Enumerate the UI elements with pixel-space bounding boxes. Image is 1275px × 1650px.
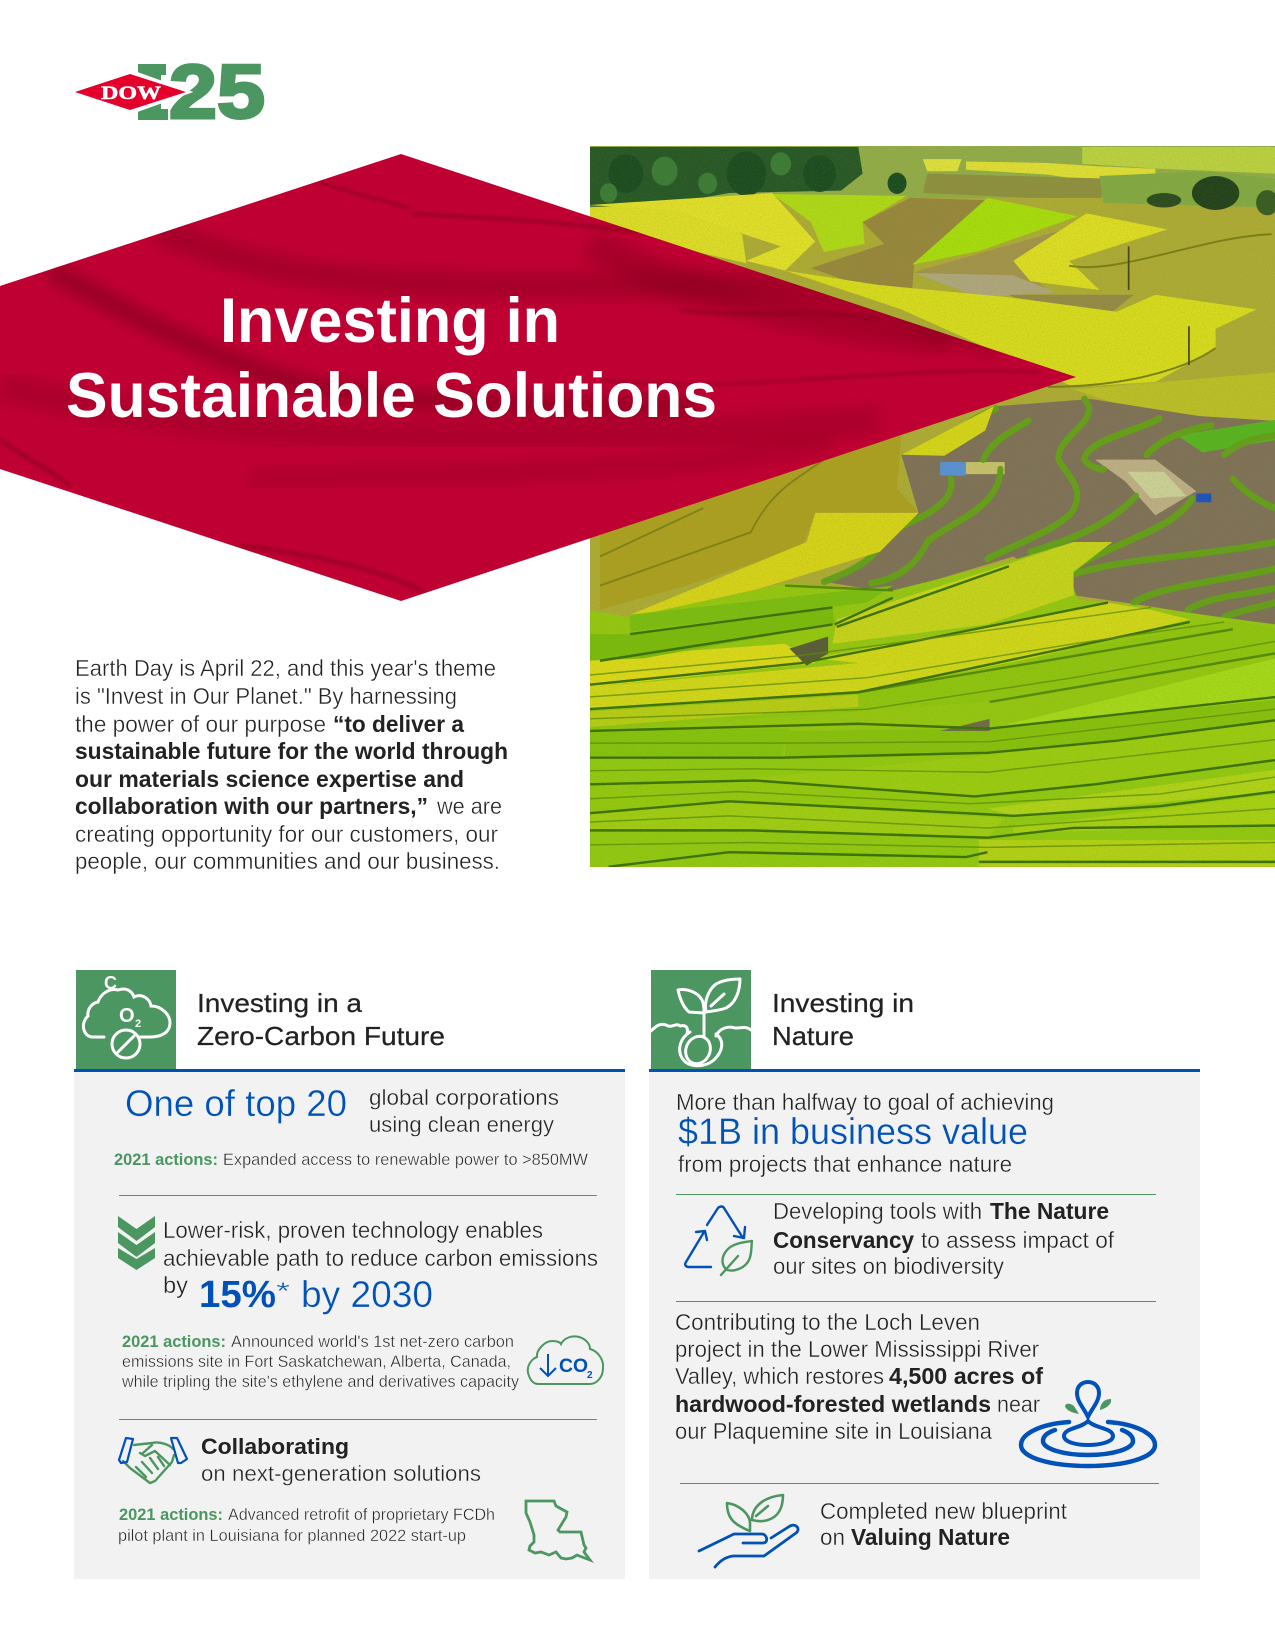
- red hexagon banner: [0, 154, 1076, 601]
- heading: Nature: [772, 1021, 854, 1051]
- 2021 actions text: Expanded access to renewable power to >850MW: [223, 1151, 588, 1169]
- stat: top 20 clean energy: One of top 20: [125, 1083, 347, 1124]
- icon: sprouting seed: [651, 970, 751, 1069]
- stat: 15 percent: Lower-risk, proven technology enables: [163, 1217, 543, 1243]
- intro paragraph: sustainable future for the world through: [75, 738, 508, 764]
- panel background: [649, 1070, 1200, 1579]
- text: collaborating: [201, 1434, 481, 1486]
- icon: Louisiana outline: [526, 1501, 590, 1560]
- text: Loch Leven: Valley, which restores: [675, 1363, 884, 1389]
- icon: cloud with O2: 2: [135, 1018, 141, 1030]
- 2021 actions text: Announced world's 1st net-zero carbon: [231, 1333, 514, 1351]
- icon: CO2 cloud: [528, 1336, 603, 1384]
- heading: Investing in: [772, 988, 914, 1018]
- panel background: [74, 1070, 625, 1579]
- icon: hand holding seedling: [699, 1495, 798, 1567]
- text: Loch Leven: near: [997, 1391, 1040, 1417]
- 2021 actions text: [121, 1333, 520, 1391]
- stat: $1B business value: $1B in business value: [678, 1111, 1028, 1152]
- stat: 15 percent: by 2030: [301, 1274, 433, 1315]
- icon: cloud with O2: C: [104, 973, 117, 993]
- intro paragraph: our materials science expertise and: [75, 766, 464, 792]
- icon: CO2 cloud: 2: [587, 1370, 593, 1381]
- stat: top 20 clean energy: using clean energy: [369, 1112, 555, 1137]
- icon: recycle arrows with leaf: [685, 1206, 752, 1275]
- intro paragraph: [75, 655, 508, 874]
- stat: 15 percent: *: [276, 1278, 290, 1305]
- blue rule: [74, 1069, 625, 1072]
- text: Loch Leven: hardwood-forested wetlands: [675, 1391, 991, 1417]
- 2021 actions text: emissions site in Fort Saskatchewan, Alberta, Canada,: [122, 1353, 511, 1371]
- panel: zero-carbon future: [74, 970, 625, 1579]
- heading: Investing in a: [197, 988, 363, 1018]
- 2021 actions text: 2021 actions:: [119, 1506, 223, 1524]
- intro paragraph: “to deliver a: [333, 711, 464, 737]
- text: nature conservancy: The Nature: [990, 1198, 1109, 1224]
- text: valuing nature: on: [820, 1524, 845, 1550]
- text: nature conservancy: to assess impact of: [921, 1227, 1115, 1253]
- title: Investing in: [220, 286, 560, 356]
- icon: CO2 cloud: CO: [559, 1356, 588, 1377]
- text: nature conservancy: our sites on biodiversity: [773, 1253, 1004, 1279]
- text: collaborating: on next-generation solutions: [201, 1461, 481, 1486]
- stat: $1B business value: from projects that enhance nature: [678, 1151, 1012, 1177]
- title: [66, 286, 717, 431]
- logo: Dow 125: [75, 49, 265, 137]
- 2021 actions text: while tripling the site's ethylene and derivatives capacity: [121, 1373, 520, 1391]
- heading: [772, 988, 914, 1051]
- logo: Dow 125: DOW: [101, 83, 161, 104]
- icon: water drop ripples: [1021, 1382, 1155, 1466]
- text: Loch Leven: Contributing to the Loch Leven: [675, 1309, 980, 1335]
- 2021 actions text: [118, 1506, 495, 1545]
- stat: 15 percent: [163, 1217, 598, 1316]
- text: Loch Leven: 4,500 acres of: [889, 1363, 1043, 1389]
- icon: handshake: [119, 1438, 187, 1483]
- intro paragraph: people, our communities and our business.: [75, 848, 500, 874]
- intro paragraph: collaboration with our partners,”: [75, 793, 428, 819]
- intro paragraph: Earth Day is April 22, and this year's theme: [75, 655, 496, 681]
- logo: Dow 125: 25: [169, 50, 265, 135]
- text: Loch Leven: project in the Lower Mississippi River: [675, 1336, 1039, 1362]
- panel: nature: [649, 970, 1200, 1579]
- blue rule: [649, 1069, 1200, 1072]
- text: nature conservancy: [773, 1198, 1115, 1279]
- stat: 15 percent: by: [163, 1272, 189, 1298]
- 2021 actions text: Advanced retrofit of proprietary FCDh: [228, 1506, 495, 1524]
- text: Loch Leven: our Plaquemine site in Louisiana: [675, 1418, 992, 1444]
- intro paragraph: we are: [436, 793, 502, 819]
- intro paragraph: is "Invest in Our Planet." By harnessing: [75, 683, 457, 709]
- photo: rice terraces: [587, 145, 1275, 872]
- heading: [197, 988, 445, 1051]
- logo: Dow 125: 1: [141, 49, 165, 137]
- stat: $1B business value: [676, 1089, 1054, 1177]
- text: collaborating: Collaborating: [201, 1434, 349, 1459]
- text: valuing nature: [820, 1498, 1068, 1550]
- text: valuing nature: Completed new blueprint: [820, 1498, 1068, 1524]
- 2021 actions text: 2021 actions:: [122, 1333, 226, 1351]
- 2021 actions text: pilot plant in Louisiana for planned 2022 start-up: [118, 1527, 466, 1545]
- stat: top 20 clean energy: global corporations: [369, 1085, 559, 1110]
- icon: cloud with O2: O: [119, 1005, 135, 1027]
- text: valuing nature: Valuing Nature: [851, 1524, 1010, 1550]
- title: Sustainable Solutions: [66, 361, 717, 431]
- heading: Zero-Carbon Future: [197, 1021, 445, 1051]
- text: Loch Leven: [675, 1309, 1043, 1444]
- text: nature conservancy: Developing tools with: [773, 1198, 982, 1224]
- stat: $1B business value: More than halfway to goal of achieving: [676, 1089, 1054, 1115]
- intro paragraph: the power of our purpose: [75, 711, 326, 737]
- text: nature conservancy: Conservancy: [773, 1227, 914, 1253]
- stat: top 20 clean energy: [125, 1083, 559, 1137]
- stat: 15 percent: achievable path to reduce carbon emissions: [163, 1245, 598, 1271]
- 2021 actions text: 2021 actions:: [114, 1151, 218, 1169]
- icon: cloud with O2: [76, 970, 176, 1069]
- stat: 15 percent: 15%: [199, 1274, 276, 1316]
- icon: chevrons down: [118, 1216, 155, 1270]
- intro paragraph: creating opportunity for our customers, our: [75, 821, 498, 847]
